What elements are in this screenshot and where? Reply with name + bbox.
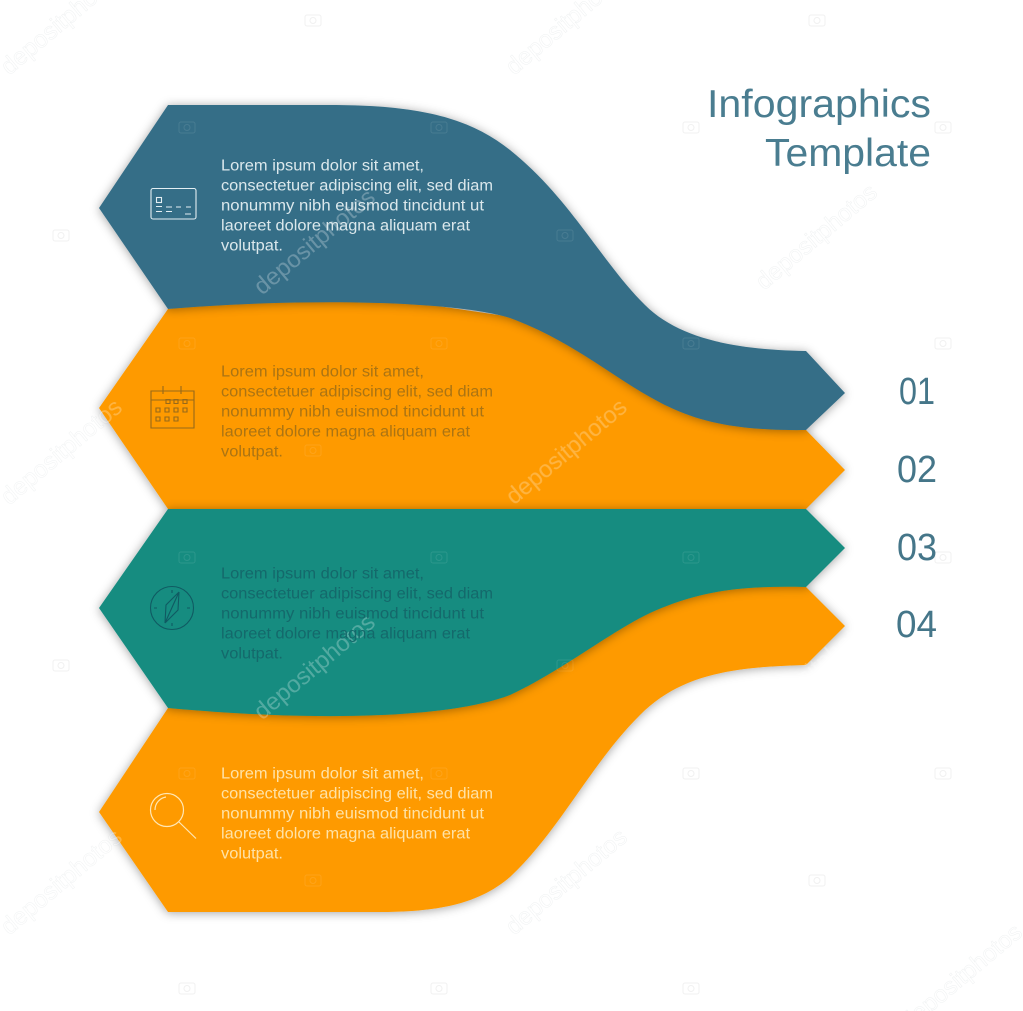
text block: ribbon 04: consectetuer adipiscing elit, sed diam	[221, 786, 493, 802]
text block: ribbon 01: volutpat.	[221, 238, 283, 254]
text block: ribbon 03: consectetuer adipiscing elit, sed diam	[221, 586, 493, 602]
watermark: depositphotos stamps on ribbons	[0, 184, 883, 940]
text block: ribbon 04: laoreet dolore magna aliquam erat	[221, 826, 471, 842]
watermark: camera marks on ribbons	[179, 122, 699, 886]
text block: ribbon 03: volutpat.	[221, 646, 283, 662]
title: Template	[765, 132, 931, 175]
text block: ribbon 03: nonummy nibh euismod tincidunt ut	[221, 606, 485, 622]
text block: ribbon 01: consectetuer adipiscing elit, sed diam	[221, 178, 493, 194]
watermark: depositphotos stamps on ribbons: depositphotos	[751, 609, 883, 725]
watermark: depositphotos stamps on ribbons: depositphotos	[249, 609, 381, 725]
text block: ribbon 03: Lorem ipsum dolor sit amet,	[221, 566, 424, 582]
text block: ribbon 03	[221, 566, 493, 662]
numbers: 02	[897, 449, 937, 491]
text block: ribbon 04: volutpat.	[221, 846, 283, 862]
title	[707, 83, 931, 175]
watermark: depositphotos stamps on white: depositphotos	[501, 824, 633, 940]
numbers	[896, 371, 937, 646]
text block: ribbon 04	[221, 766, 493, 862]
text block: ribbon 04: nonummy nibh euismod tincidunt ut	[221, 806, 485, 822]
text block: ribbon 01: nonummy nibh euismod tincidunt ut	[221, 198, 485, 214]
text block: ribbon 02: consectetuer adipiscing elit, sed diam	[221, 384, 493, 400]
text block: ribbon 02: volutpat.	[221, 444, 283, 460]
text block: ribbon 01: Lorem ipsum dolor sit amet,	[221, 158, 424, 174]
icon: compass	[150, 586, 194, 630]
watermark: depositphotos stamps on white: depositphotos	[751, 179, 883, 295]
numbers: 01	[899, 371, 935, 413]
text block: ribbon 04: Lorem ipsum dolor sit amet,	[221, 766, 424, 782]
text block: ribbon 01: laoreet dolore magna aliquam erat	[221, 218, 471, 234]
watermark: depositphotos stamps on ribbons: depositphotos	[249, 184, 381, 300]
icon: credit card	[151, 188, 196, 219]
ribbon 03: teal	[99, 509, 845, 716]
ribbon 04: orange	[99, 575, 845, 912]
text block: ribbon 02: Lorem ipsum dolor sit amet,	[221, 364, 424, 380]
numbers: 03	[897, 527, 937, 569]
ribbon 02: orange	[99, 290, 845, 509]
text block: ribbon 01	[221, 158, 493, 254]
icon: calendar	[151, 386, 194, 428]
text block: ribbon 03: laoreet dolore magna aliquam erat	[221, 626, 471, 642]
icon: magnifier	[150, 794, 196, 838]
title: Infographics	[707, 83, 931, 126]
ribbon 01: blue	[99, 105, 845, 430]
watermark: depositphotos stamps on ribbons: depositphotos	[501, 394, 633, 510]
text block: ribbon 02: laoreet dolore magna aliquam erat	[221, 424, 471, 440]
text block: ribbon 02	[221, 364, 493, 460]
text block: ribbon 02: nonummy nibh euismod tincidunt ut	[221, 404, 485, 420]
numbers: 04	[896, 604, 937, 646]
